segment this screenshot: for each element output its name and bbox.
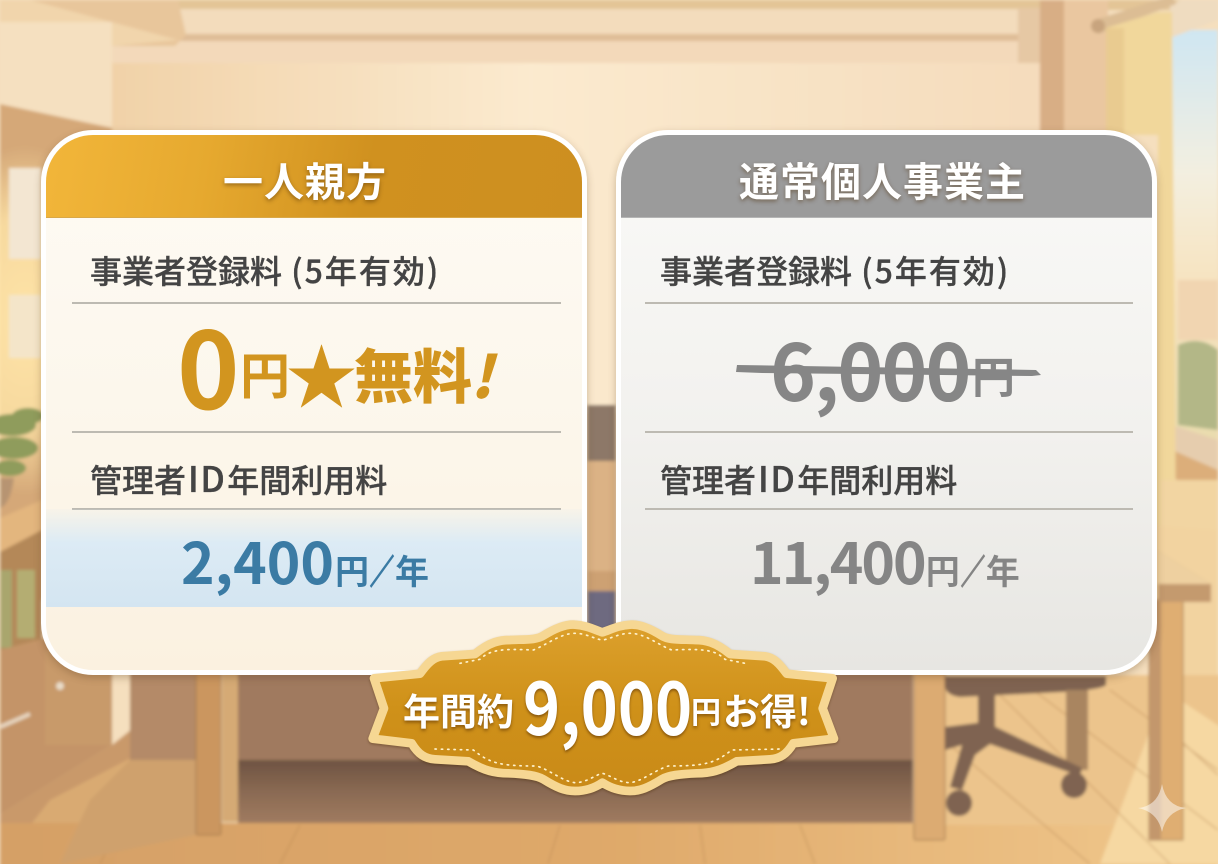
cabinet left: [0, 620, 112, 815]
price band: 2,400 yen per year: [46, 509, 582, 607]
badge text: 円: [691, 688, 721, 732]
price band: 2,400 yen per year: 2,400円 年: [181, 519, 429, 601]
callout badge: 年間約9,000円お得: [368, 620, 839, 798]
badge text: [402, 651, 811, 756]
floor: [0, 823, 1218, 864]
ceiling bands: [0, 0, 1218, 10]
price: 11,400 yen per year: 11,400円 年: [750, 519, 1020, 601]
price: free registration: [177, 286, 498, 440]
label: admin ID annual fee: 管理者ID年間利用料: [90, 452, 387, 503]
panel: 通常個人事業主: [616, 130, 1157, 675]
panel: 一人親方: [41, 130, 587, 675]
heading: 一人親方: [46, 135, 582, 218]
heading: 通常個人事業主: [621, 135, 1152, 218]
price: free registration: ★: [286, 322, 357, 424]
price: struck-through 6,000 yen: 円: [972, 344, 1015, 406]
price: struck-through 6,000 yen: [736, 312, 1041, 424]
badge text: お得!: [723, 682, 811, 736]
price: 11,400 yen per year: ／: [960, 545, 985, 594]
badge text: 年間約: [403, 682, 514, 736]
plant and shelf left: [0, 500, 42, 552]
desk legs: [196, 672, 221, 835]
under-desk drawers and shadow: [130, 672, 196, 760]
right wall columns, curtain, window: [1040, 0, 1064, 135]
badge text: 9,000: [523, 651, 692, 756]
back wall between cards: [587, 405, 616, 461]
left wall and window frame: [0, 22, 112, 122]
heading: 通常個人事業主: 通常個人事業主: [739, 150, 1026, 208]
price: free registration: 0: [177, 286, 240, 440]
price band: 2,400 yen per year: ／: [370, 545, 394, 594]
office chair: [945, 676, 1106, 816]
price: free registration: 円: [240, 337, 290, 409]
price: free registration: !: [470, 331, 493, 415]
price: free registration: 無料: [354, 330, 472, 415]
sparkle watermark: [1138, 784, 1186, 832]
label: registration fee: 事業者登録料 (5年有効): [90, 247, 440, 293]
price: struck-through 6,000 yen: 6,000: [770, 312, 969, 424]
label: registration fee: 事業者登録料 (5年有効): [660, 247, 1010, 293]
label: admin ID annual fee: 管理者ID年間利用料: [660, 452, 957, 503]
heading: 一人親方: 一人親方: [223, 150, 387, 208]
